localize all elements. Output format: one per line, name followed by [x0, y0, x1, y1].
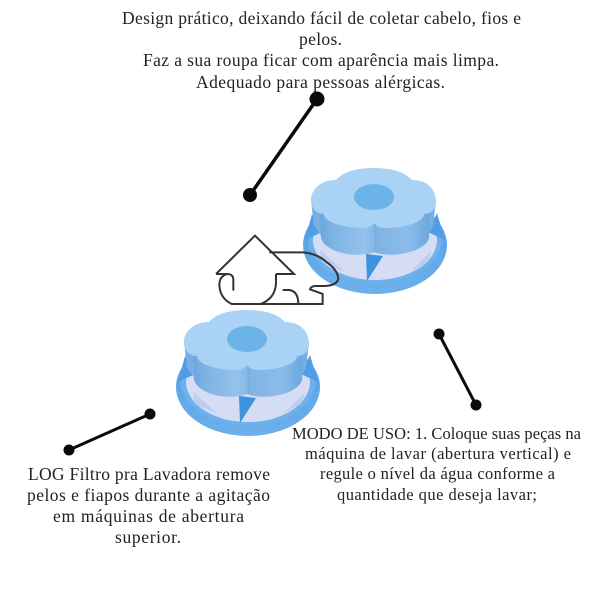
product: filter top right — [303, 168, 447, 294]
text: usage instructions: máquina de lavar (abertura vertical) e — [305, 444, 571, 463]
text: product description: em máquinas de abertura — [53, 506, 244, 526]
text: design benefits: Faz a sua roupa ficar com aparência mais limpa. — [143, 50, 499, 70]
text: product description: superior. — [115, 527, 181, 547]
text: usage instructions: MODO DE USO: 1. Coloque suas peças na — [292, 424, 582, 443]
text: product description — [27, 464, 270, 547]
text: usage instructions: quantidade que deseja lavar; — [337, 485, 537, 504]
text: design benefits: pelos. — [299, 29, 342, 49]
icon: house logo outline — [216, 236, 338, 304]
text: product description: pelos e fiapos durante a agitação — [27, 485, 270, 505]
text: usage instructions: regule o nível da água conforme a — [320, 464, 556, 483]
text: design benefits: Adequado para pessoas alérgicas. — [196, 72, 445, 92]
callout line: top — [243, 92, 324, 202]
callout line: left — [64, 408, 156, 456]
text: design benefits: Design prático, deixando fácil de coletar cabelo, fios e — [122, 8, 521, 28]
callout line: right — [434, 328, 482, 410]
text: product description: LOG Filtro pra Lavadora remove — [28, 464, 270, 484]
product: filter bottom left — [176, 310, 320, 436]
text: usage instructions — [292, 424, 582, 504]
text: design benefits — [122, 8, 521, 92]
